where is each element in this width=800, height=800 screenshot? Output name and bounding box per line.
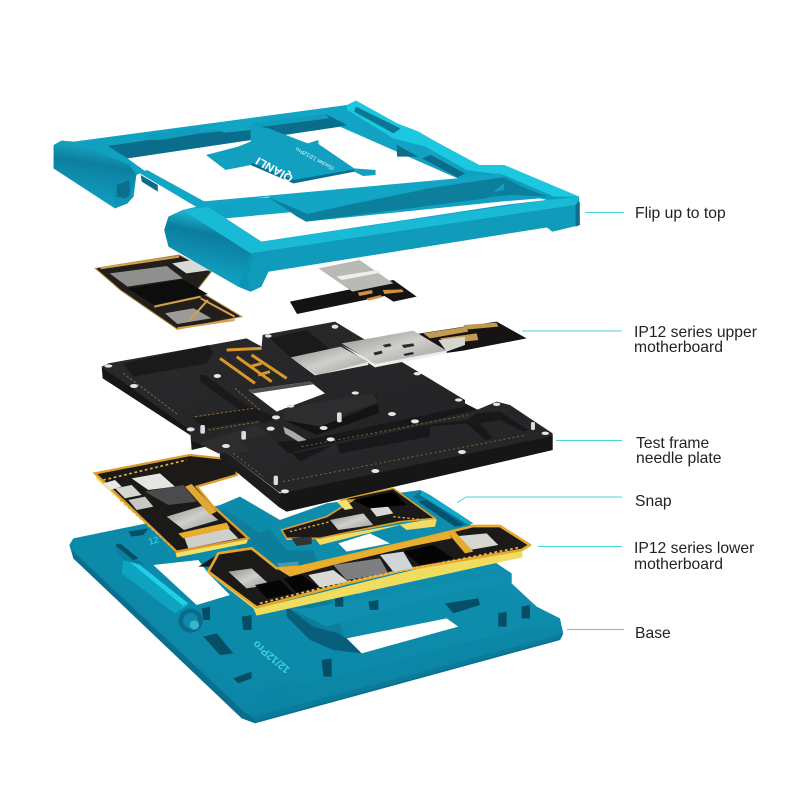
callout: base bbox=[567, 625, 671, 642]
callout: base: Base bbox=[635, 625, 671, 642]
back handle bbox=[54, 141, 136, 208]
base plate: 12Pro bbox=[356, 580, 382, 596]
callout: test frame needle plate bbox=[556, 435, 722, 467]
hinge pin bbox=[179, 609, 203, 633]
gold connectors bbox=[220, 348, 287, 383]
callout: snap bbox=[457, 493, 672, 510]
engraved model text: 12/12Pro bbox=[250, 637, 293, 676]
callout: upper motherboard: motherboard bbox=[634, 339, 723, 356]
dark slots bbox=[115, 528, 530, 683]
central plate: QIANLI bbox=[253, 154, 296, 184]
central plate bbox=[206, 125, 376, 184]
upper left part of lower motherboard bbox=[95, 455, 248, 557]
front test frame plate bbox=[104, 325, 553, 512]
callout: test frame needle plate: needle plate bbox=[636, 450, 722, 467]
screw holes bbox=[104, 325, 549, 493]
front bar top surface bbox=[170, 197, 579, 253]
front handle bbox=[164, 210, 251, 287]
base plate: 12 bbox=[147, 535, 160, 547]
callout: upper motherboard: IP12 series upper bbox=[634, 324, 757, 341]
callout: test frame needle plate: Test frame bbox=[636, 435, 710, 452]
raised centre block bbox=[218, 497, 277, 533]
upper motherboard left section bbox=[54, 101, 580, 329]
top flip frame bbox=[54, 101, 580, 292]
upper motherboard bbox=[291, 322, 527, 375]
callout: snap: Snap bbox=[635, 493, 672, 510]
callout: lower motherboard bbox=[538, 540, 754, 573]
needle plate group bbox=[102, 322, 553, 512]
side rail bbox=[140, 170, 208, 207]
base plate bbox=[69, 490, 563, 723]
crossbar bbox=[201, 173, 502, 213]
right bar top bbox=[347, 101, 579, 197]
callout: lower motherboard: motherboard bbox=[634, 556, 723, 573]
small board right of handle bbox=[290, 260, 417, 314]
callout: lower motherboard: IP12 series lower bbox=[634, 540, 754, 557]
inner walls bbox=[108, 114, 347, 158]
rear test frame plate bbox=[102, 322, 478, 458]
front bar face bbox=[238, 205, 580, 292]
callout: flip up to top: Flip up to top bbox=[635, 205, 726, 222]
callout: upper motherboard bbox=[522, 324, 757, 356]
lower motherboard and base group bbox=[69, 455, 563, 723]
raised rail bbox=[122, 558, 188, 613]
snap bbox=[413, 491, 473, 527]
frame body with openings bbox=[54, 101, 580, 292]
central plate: iSocket 12/12Pro bbox=[295, 145, 336, 171]
front long motherboard bbox=[198, 526, 530, 616]
right part of lower motherboard bbox=[282, 488, 437, 546]
